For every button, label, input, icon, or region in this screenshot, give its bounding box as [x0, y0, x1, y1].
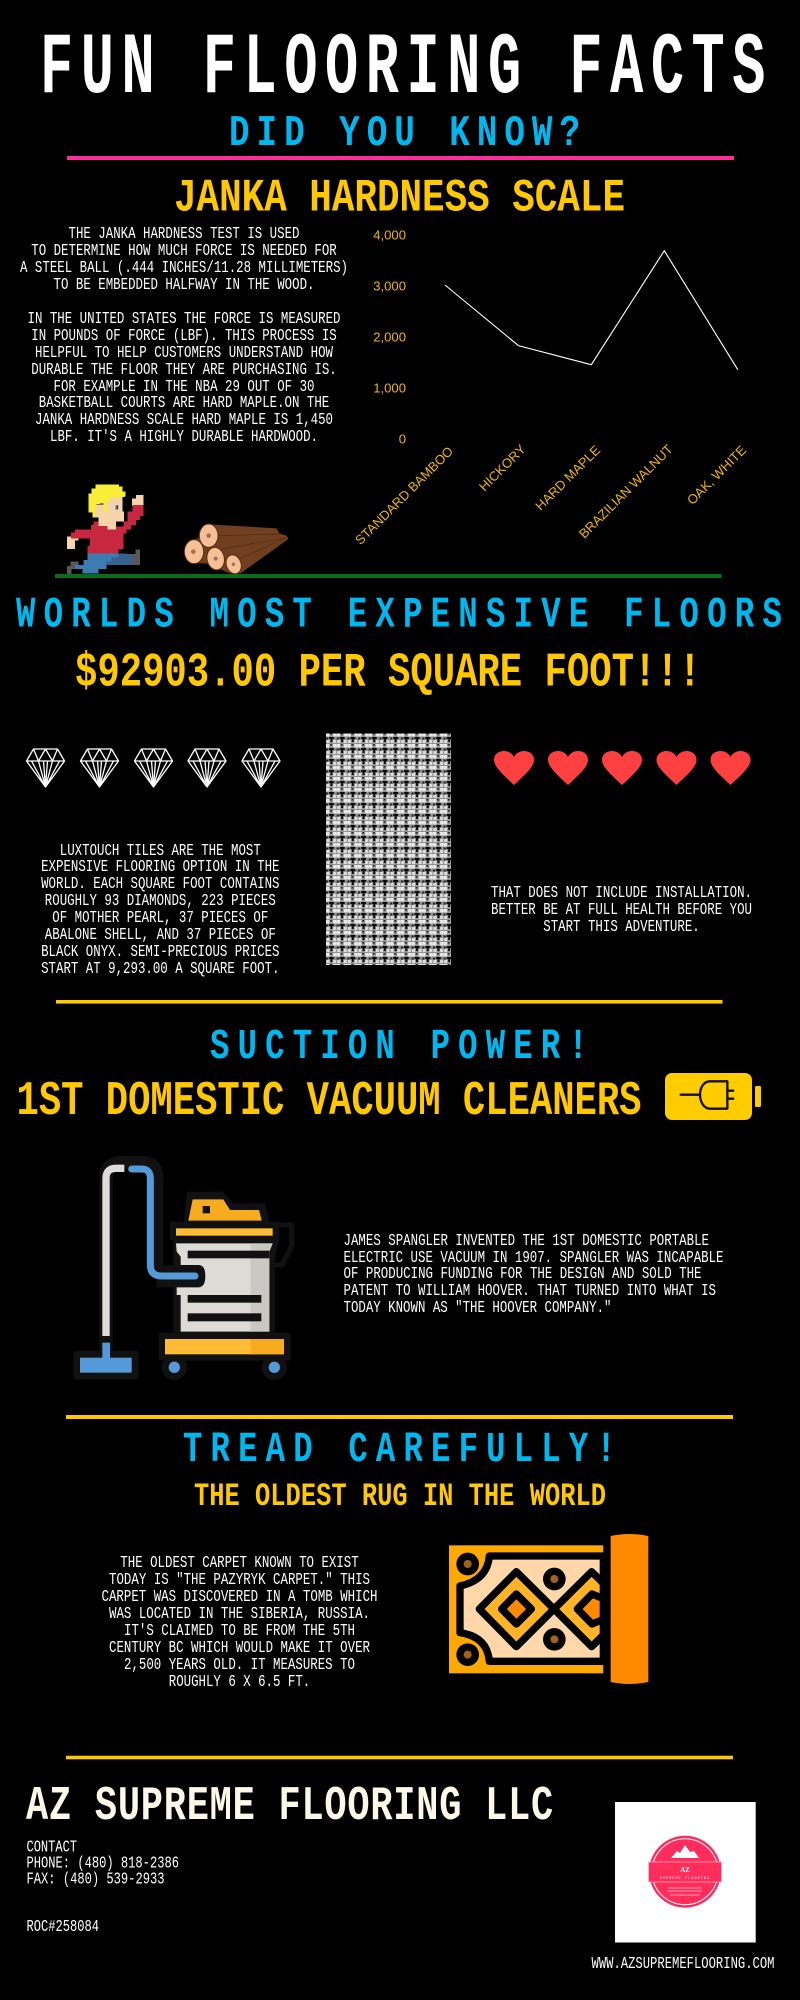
logo card [615, 1802, 756, 1942]
line chart: janka hardness: 2,000 [373, 330, 406, 344]
line chart: janka hardness: 3,000 [373, 278, 406, 294]
text block: luxtouch tiles: OF MOTHER PEARL, 37 PIECES OF [52, 909, 268, 928]
icon: battery with plug [665, 1073, 761, 1120]
line chart: janka hardness: BRAZILIAN WALNUT [576, 442, 676, 541]
subtitle: did you know: DID YOU KNOW? [229, 109, 587, 159]
text block: pazyryk carpet: THE OLDEST CARPET KNOWN TO EXIST [120, 1554, 359, 1573]
text block: janka explanation: A STEEL BALL (.444 INCHES/11.28 MILLIMETERS) [20, 259, 348, 278]
logo card: AZ [680, 1866, 690, 1874]
line chart: janka hardness [352, 228, 749, 548]
line chart: janka hardness: 0 [399, 432, 406, 446]
text block: luxtouch tiles: LUXTOUCH TILES ARE THE MOST [60, 842, 261, 861]
heading: oldest rug: THE OLDEST RUG IN THE WORLD [194, 1478, 606, 1515]
text block: janka explanation: TO DETERMINE HOW MUCH FORCE IS NEEDED FOR [31, 242, 337, 261]
icon: vacuum cleaner [73, 1163, 292, 1380]
icon: stack of logs [184, 524, 288, 576]
text block: contact details: FAX: (480) 539-2933 [26, 1870, 164, 1890]
tile pattern swatch [326, 734, 451, 965]
text block: janka explanation: THE JANKA HARDNESS TEST IS USED [68, 225, 300, 244]
text block: pazyryk carpet: 2,500 YEARS OLD. IT MEASURES TO [124, 1656, 355, 1675]
text block: contact details: PHONE: (480) 818-2386 [26, 1854, 179, 1874]
text block: james spangler: TODAY KNOWN AS "THE HOOVER COMPANY." [344, 1299, 612, 1318]
text block: pazyryk carpet: WAS LOCATED IN THE SIBERIA, RUSSIA. [109, 1605, 370, 1624]
text block: janka explanation: TO BE EMBEDDED HALFWAY IN THE WOOD. [54, 276, 314, 295]
text: roc number: ROC#258084 [26, 1918, 99, 1937]
text block: janka explanation: IN THE UNITED STATES THE FORCE IS MEASURED [28, 310, 340, 329]
text block: janka explanation: JANKA HARDNESS SCALE HARD MAPLE IS 1,450 [35, 411, 333, 430]
text block: contact details [26, 1839, 179, 1890]
text block: installation note [491, 884, 752, 937]
text block: janka explanation [20, 225, 348, 447]
text block: james spangler [344, 1232, 724, 1318]
text block: janka explanation: BASKETBALL COURTS ARE HARD MAPLE.ON THE [39, 394, 329, 413]
heading: company name: AZ SUPREME FLOORING LLC [26, 1780, 554, 1834]
text block: pazyryk carpet: TODAY IS "THE PAZYRYK CARPET." THIS [109, 1571, 370, 1590]
icon: rolled carpet [449, 1534, 648, 1684]
logo card: SUPREME FLOORING [660, 1877, 710, 1881]
icons: five diamonds [26, 749, 280, 787]
text block: janka explanation: IN POUNDS OF FORCE (LBF). THIS PROCESS IS [31, 327, 337, 346]
text block: janka explanation: FOR EXAMPLE IN THE NBA 29 OUT OF 30 [54, 378, 314, 397]
text block: installation note: START THIS ADVENTURE. [543, 918, 700, 937]
heading: janka hardness scale: JANKA HARDNESS SCALE [174, 172, 625, 224]
text block: pazyryk carpet: CENTURY BC WHICH WOULD MAKE IT OVER [109, 1639, 370, 1658]
line chart: janka hardness: STANDARD BAMBOO [352, 444, 456, 548]
line chart: janka hardness: OAK, WHITE [684, 442, 749, 508]
text block: luxtouch tiles [41, 842, 280, 979]
text block: pazyryk carpet: IT'S CLAIMED TO BE FROM THE 5TH [124, 1622, 355, 1641]
heading: suction power: SUCTION POWER! [210, 1022, 596, 1071]
line chart: janka hardness: HARD MAPLE [532, 442, 603, 513]
text block: janka explanation: HELPFUL TO HELP CUSTOMERS UNDERSTAND HOW [35, 344, 334, 363]
text block: janka explanation: LBF. IT'S A HIGHLY DURABLE HARDWOOD. [50, 428, 318, 447]
line chart: janka hardness: 1,000 [373, 380, 406, 396]
text block: luxtouch tiles: ABALONE SHELL, AND 37 PIECES OF [45, 926, 276, 945]
icons: five hearts [494, 751, 750, 785]
text block: luxtouch tiles: START AT 9,293.00 A SQUARE FOOT. [41, 960, 280, 979]
text block: luxtouch tiles: EXPENSIVE FLOORING OPTION IN THE [41, 858, 280, 877]
line chart: janka hardness: 4,000 [373, 228, 406, 242]
heading: tread carefully: TREAD CAREFULLY! [183, 1425, 624, 1474]
text block: luxtouch tiles: WORLD. EACH SQUARE FOOT CONTAINS [41, 875, 280, 894]
text block: pazyryk carpet [102, 1554, 378, 1692]
text block: luxtouch tiles: ROUGHLY 93 DIAMONDS, 223 PIECES [45, 892, 276, 911]
icon: pixel boy running [67, 484, 144, 574]
text block: luxtouch tiles: BLACK ONYX. SEMI-PRECIOUS PRICES [41, 943, 280, 962]
text block: pazyryk carpet: CARPET WAS DISCOVERED IN A TOMB WHICH [102, 1588, 378, 1607]
line chart: janka hardness: HICKORY [476, 441, 529, 494]
heading: 1st domestic vacuum cleaners: 1ST DOMESTIC VACUUM CLEANERS [16, 1075, 642, 1129]
text block: pazyryk carpet: ROUGHLY 6 X 6.5 FT. [169, 1673, 310, 1692]
text block: contact details: CONTACT [26, 1839, 77, 1858]
text block: janka explanation: DURABLE THE FLOOR THEY ARE PURCHASING IS. [31, 361, 337, 380]
